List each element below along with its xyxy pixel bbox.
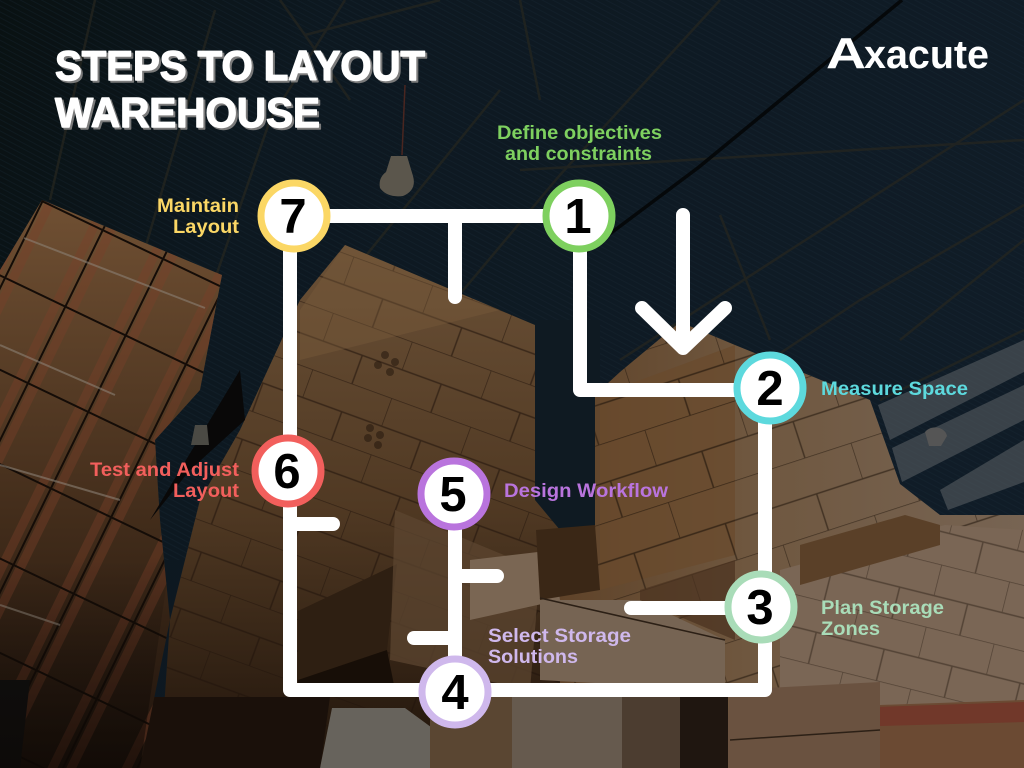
line: step 2 down and along bottom to left, up to step 7 bbox=[290, 216, 765, 690]
route lines connecting the seven steps bbox=[290, 216, 770, 692]
arrow pointing down bbox=[642, 215, 725, 348]
step 5 node bbox=[421, 461, 487, 527]
left stack bbox=[0, 200, 222, 768]
title: WAREHOUSE bbox=[57, 91, 322, 138]
logo: xacute bbox=[864, 33, 989, 77]
title: STEPS TO LAYOUT bbox=[55, 42, 425, 89]
step 7 node bbox=[261, 183, 327, 249]
title: STEPS TO LAYOUT bbox=[57, 44, 427, 91]
step 5 node: 5 bbox=[439, 468, 467, 522]
step 3 label: Zones bbox=[821, 619, 880, 640]
step 6 label: Layout bbox=[173, 481, 240, 502]
dark main roof beam bbox=[575, 0, 902, 260]
line: stub from step 3 bbox=[631, 601, 761, 615]
step 7 label bbox=[157, 196, 240, 238]
step 7 label: Maintain bbox=[157, 196, 239, 217]
gap behind stacks bbox=[525, 320, 600, 540]
line: step 1 to step 2 bbox=[580, 216, 770, 390]
line: step 5 to step 4 bbox=[448, 494, 462, 692]
step 5 label: Design Workflow bbox=[504, 481, 668, 502]
step 4 label: Solutions bbox=[488, 647, 578, 668]
step 1 label: and constraints bbox=[505, 144, 652, 165]
step 6 label: Test and Adjust bbox=[90, 460, 240, 481]
step 3 node: 3 bbox=[746, 581, 774, 635]
step 4 label: Select Storage bbox=[488, 626, 631, 647]
step 1 node: 1 bbox=[564, 190, 592, 244]
logo bbox=[826, 29, 989, 78]
right stack bbox=[560, 322, 1024, 768]
step 3 label: Plan Storage bbox=[821, 598, 944, 619]
step 7 label: Layout bbox=[173, 217, 240, 238]
logo: A bbox=[826, 29, 866, 78]
line: stub from left edge bbox=[290, 517, 333, 531]
step 6 label bbox=[90, 460, 240, 502]
step 4 label bbox=[488, 626, 631, 668]
line: top between 7 and 1 bbox=[294, 209, 579, 223]
step 2 node bbox=[737, 355, 803, 421]
ceiling lamp bbox=[402, 85, 405, 155]
step 2 node: 2 bbox=[756, 362, 784, 416]
step 6 node: 6 bbox=[273, 445, 301, 499]
line: stub right of center bbox=[455, 569, 497, 583]
step 4 node: 4 bbox=[441, 666, 469, 720]
boxes at the bottom bbox=[320, 708, 435, 768]
step 1 label: Define objectives bbox=[497, 123, 662, 144]
title: WAREHOUSE bbox=[55, 89, 320, 136]
step 1 node bbox=[546, 183, 612, 249]
right lit skylight strip bbox=[878, 340, 1024, 510]
step 6 node bbox=[255, 438, 321, 504]
step 3 label bbox=[821, 598, 944, 640]
step 2 label: Measure Space bbox=[821, 379, 968, 400]
step 3 node bbox=[728, 574, 794, 640]
title bbox=[55, 42, 427, 138]
dark gap and hanging lamp bbox=[150, 370, 245, 520]
step 4 node bbox=[422, 659, 488, 725]
center stack bbox=[160, 245, 560, 768]
step 7 node: 7 bbox=[279, 190, 307, 244]
line: branch from top line bbox=[448, 216, 462, 297]
line: stub left of center bbox=[414, 631, 455, 645]
step 1 label bbox=[497, 123, 662, 165]
